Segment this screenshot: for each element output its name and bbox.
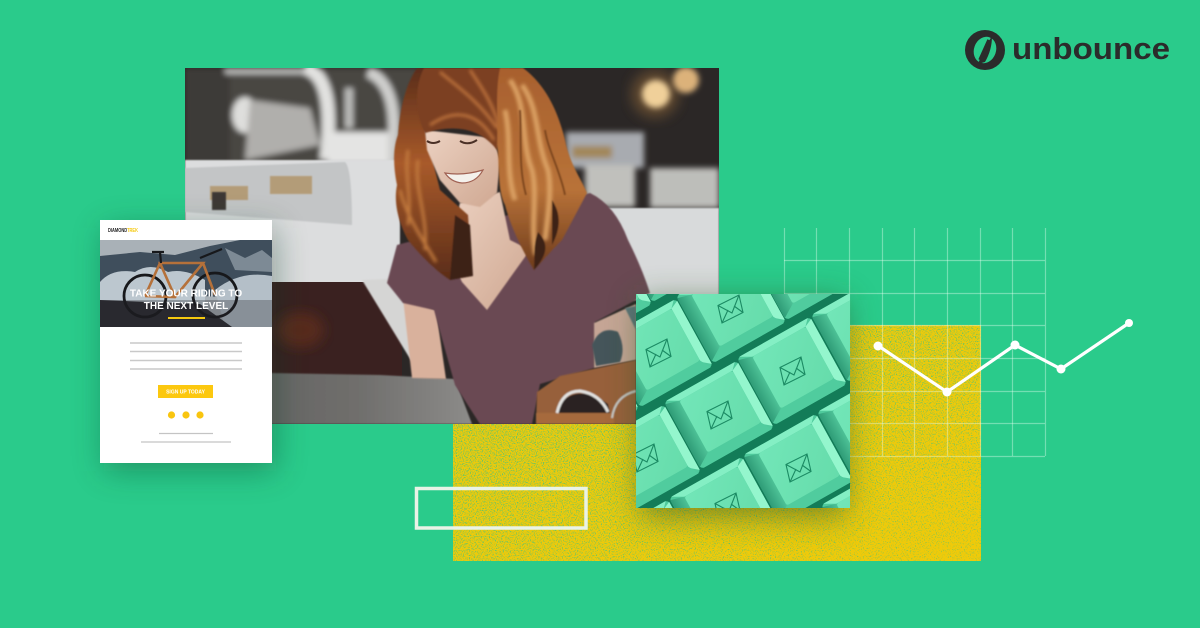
pagination dots [168, 411, 204, 419]
left arm [403, 298, 446, 379]
wordmark: unbounce [1012, 31, 1170, 66]
woman figure [387, 68, 650, 424]
chest and neck [458, 191, 526, 310]
sign up button [158, 385, 213, 398]
footer lines [141, 434, 231, 442]
keys [636, 294, 850, 508]
envelope icons [633, 295, 811, 521]
yellow noise panel [453, 325, 981, 561]
eyes [427, 140, 477, 143]
smile [445, 170, 483, 183]
body text lines [130, 343, 242, 369]
bangs [417, 68, 510, 150]
line chart [874, 319, 1133, 396]
laptop [272, 372, 472, 424]
logo mark [965, 30, 1005, 70]
left hair [394, 68, 473, 280]
chart grid [784, 228, 1046, 456]
keyboard photo with envelope keys [636, 294, 850, 508]
hero title: TAKE YOUR RIDING TO [130, 288, 242, 300]
card shadow [104, 228, 276, 471]
unbounce logo [965, 30, 1170, 70]
photo: woman smiling at laptop [185, 67, 719, 424]
keyboard shadow [640, 300, 846, 516]
right hair [497, 68, 587, 270]
sign up button: SIGN UP TODAY [166, 390, 206, 396]
face [425, 130, 500, 207]
brand name: DIAMONDTREK [108, 228, 138, 234]
hero image: bicycle in mountains [100, 240, 272, 327]
bokeh lights [631, 67, 699, 118]
landing page card [100, 220, 272, 463]
leather bag [536, 360, 636, 424]
shirt [387, 193, 650, 424]
tattooed arm [594, 304, 636, 368]
photo background: blurred cafe [185, 67, 719, 376]
hero title: THE NEXT LEVEL [144, 301, 228, 312]
outlined rectangle [416, 488, 586, 528]
main illustration canvas [86, 30, 1169, 561]
